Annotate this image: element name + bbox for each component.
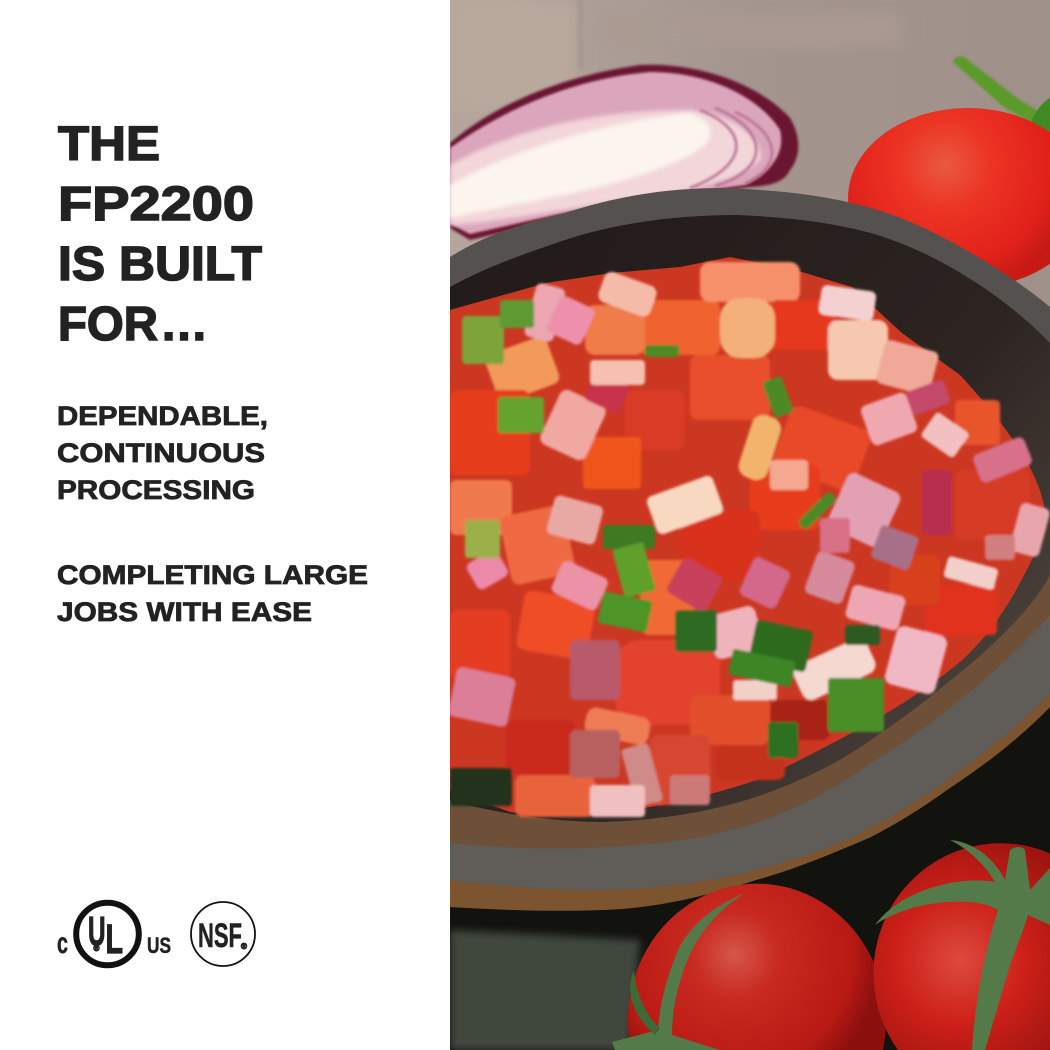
bowl lower brown edge — [450, 693, 1050, 911]
panel: white text column — [0, 0, 450, 1050]
icon: tomato bottom center — [612, 884, 886, 1050]
text block: dependable continuous processing: CONTINUOUS — [57, 438, 265, 468]
icon: cULus certification mark: ® — [94, 944, 100, 953]
icon: cULus certification mark: U — [88, 908, 106, 954]
salsa — [447, 257, 1050, 817]
icon: red onion half — [450, 65, 798, 240]
bowl outer rim — [450, 188, 1050, 910]
green cloth — [450, 930, 640, 1050]
title: ... — [162, 298, 208, 351]
title: IS BUILT — [58, 238, 262, 291]
text block: dependable continuous processing: DEPENDABLE, — [57, 401, 268, 431]
title: THE — [58, 118, 160, 171]
text block: dependable continuous processing: PROCESSING — [57, 475, 255, 505]
green pepper dices — [462, 316, 504, 364]
icon: tomato upper right — [848, 56, 1050, 288]
icon: cULus certification mark: L — [106, 916, 123, 962]
bowl interior — [450, 215, 1050, 822]
bowl — [450, 188, 1050, 911]
title: FOR — [58, 298, 158, 351]
icon: cULus certification mark — [57, 903, 171, 965]
salsa base — [450, 257, 1046, 815]
title — [58, 118, 262, 351]
bowl lower grey band — [450, 615, 1050, 890]
icon: tomato bottom right — [873, 840, 1050, 1050]
icon: cULus certification mark: c — [57, 927, 68, 960]
icon: NSF certification mark: ® — [241, 942, 247, 951]
title: FP2200 — [58, 178, 254, 231]
orange tomato dices — [640, 300, 720, 355]
text block: completing large jobs: COMPLETING LARGE — [57, 560, 368, 590]
text block: completing large jobs: JOBS WITH EASE — [57, 597, 312, 627]
wooden table background — [450, 0, 1050, 307]
icon: NSF certification mark — [191, 902, 255, 966]
icon: NSF certification mark: NSF — [198, 917, 242, 955]
dark shadow beneath the bowl — [450, 690, 1050, 1050]
text block: dependable continuous processing — [57, 401, 268, 505]
bowl lower rim brown band — [450, 575, 1050, 848]
text block: completing large jobs — [57, 560, 368, 627]
panel: salsa photograph — [447, 0, 1050, 1050]
pink onion dices — [523, 282, 566, 343]
icon: cULus certification mark: US — [147, 933, 171, 958]
